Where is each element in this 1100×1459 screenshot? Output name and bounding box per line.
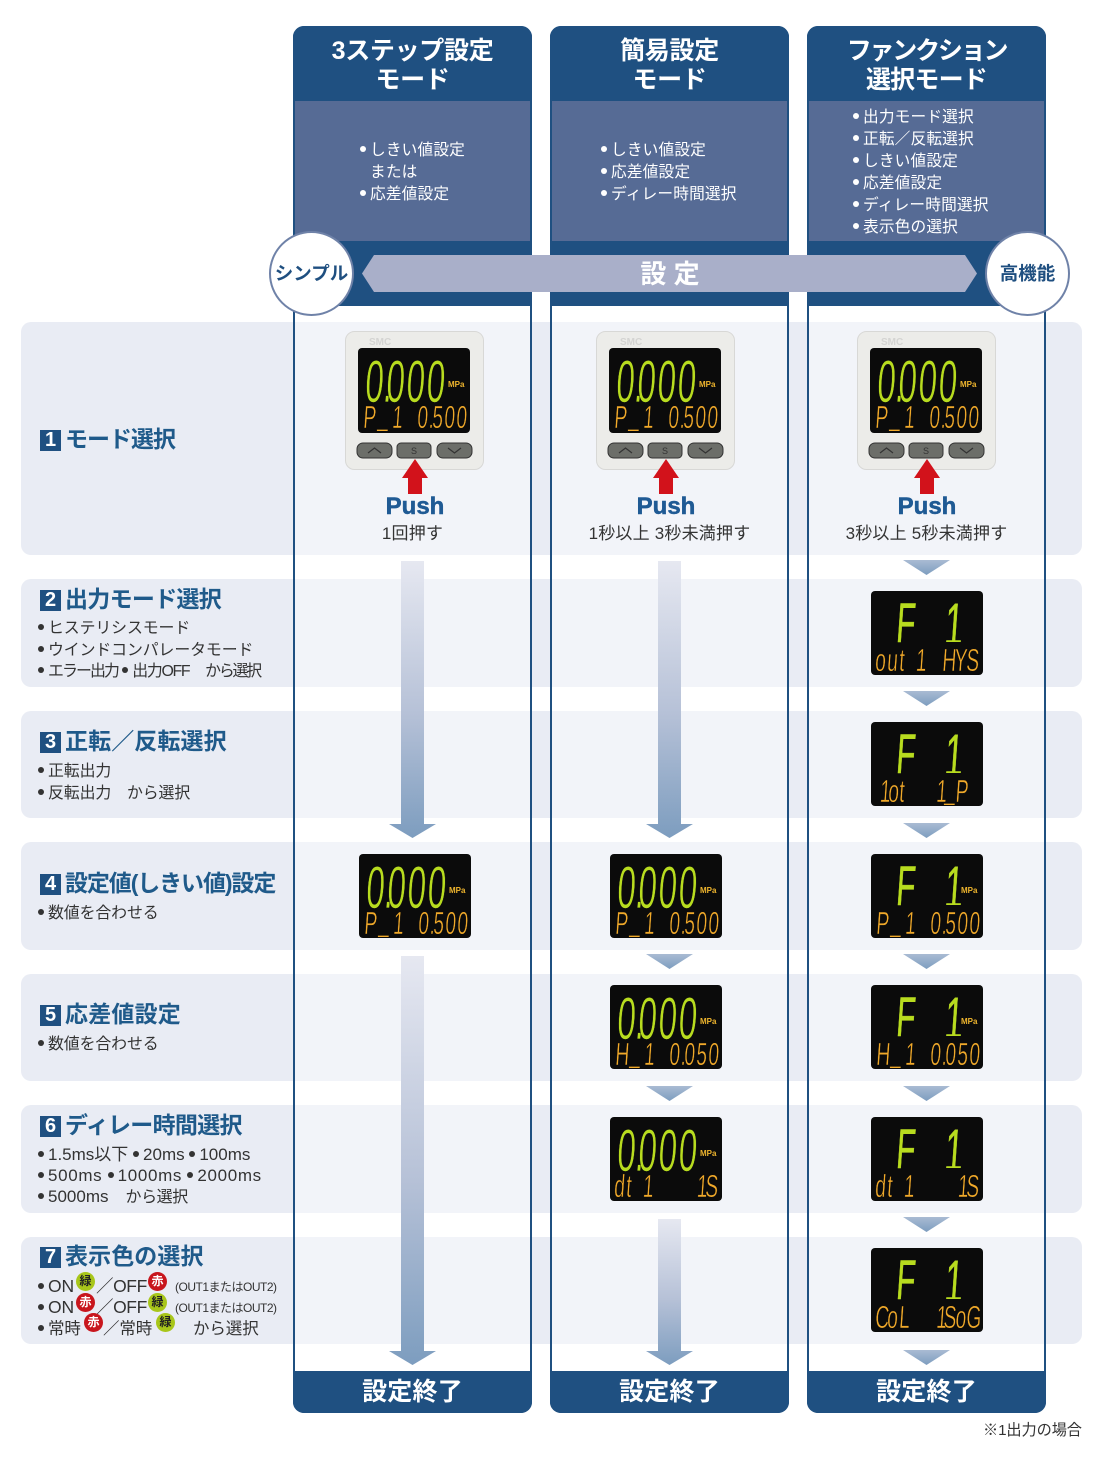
options	[38, 1145, 262, 1206]
device col 3	[857, 331, 996, 470]
step arrow	[903, 954, 950, 969]
device col 3: 0.000	[875, 349, 960, 416]
push label col 2: Push	[637, 493, 695, 520]
column: function select mode	[807, 26, 1046, 1413]
step 1 label: 1	[45, 429, 56, 451]
column header: 3ステップ設定	[332, 37, 493, 65]
display col 3 step 3: F	[895, 722, 918, 785]
step 2 label	[38, 586, 262, 680]
display col 3 step 6: 1	[943, 1118, 966, 1185]
footnote: ※1出力の場合	[983, 1422, 1082, 1439]
green badge: 緑	[151, 1295, 164, 1309]
device col 2: SMC	[620, 337, 642, 348]
heading: 3	[45, 731, 56, 753]
off text: ／OFF	[96, 1276, 147, 1296]
heading: 2	[45, 589, 56, 611]
step 5 label	[38, 1001, 181, 1053]
heading: 正転／反転選択	[65, 728, 227, 754]
option line 3 text: 常時	[48, 1320, 81, 1338]
display col 3 step 6	[871, 1117, 983, 1201]
column footer: 設定終了	[876, 1378, 977, 1406]
column header	[550, 26, 789, 101]
device col 1: 0.000	[363, 349, 448, 416]
device col 1: MPa	[448, 380, 465, 389]
column header: ファンクション	[847, 37, 1006, 65]
options: 反転出力 から選択	[48, 784, 190, 802]
step arrow	[646, 1086, 693, 1101]
red badge	[84, 1313, 103, 1332]
heading: 7	[45, 1246, 56, 1268]
red arrow col 1	[402, 459, 428, 494]
green badge	[156, 1313, 175, 1332]
feature list panel: ディレー時間選択	[863, 197, 989, 214]
caption col 1: 1回押す	[382, 524, 443, 543]
step arrow	[903, 823, 950, 838]
step 3 label	[38, 728, 227, 802]
header lower bar	[293, 241, 532, 306]
device col 1: P_ 1	[362, 396, 405, 435]
display col 1 step 4	[359, 854, 471, 938]
display col 3 step 5: 1	[943, 986, 966, 1053]
display col 3 step 7	[871, 1248, 983, 1332]
step 4 label	[38, 870, 276, 922]
display col 3 step 3: 1	[943, 723, 966, 790]
circle: high function: 高機能	[1000, 263, 1055, 284]
column: 3 step mode	[293, 26, 532, 1413]
device col 1: SMC	[369, 337, 391, 348]
option line 1 text: ON	[48, 1276, 74, 1296]
options: 正転出力	[48, 763, 111, 780]
device col 1: 0.500	[416, 399, 469, 435]
green badge: 緑	[79, 1274, 92, 1288]
feature list panel: しきい値設定	[611, 142, 706, 159]
step arrow	[903, 1217, 950, 1232]
display col 2 step 6	[610, 1117, 722, 1201]
feature list panel: 出力モード選択	[863, 109, 974, 126]
step 6 label	[38, 1112, 262, 1206]
caption col 2: 1秒以上 3秒未満押す	[589, 524, 750, 543]
long arrow col 1 lower	[389, 956, 436, 1365]
heading: 応差値設定	[65, 1001, 181, 1027]
step arrow	[903, 560, 950, 575]
red badge	[148, 1272, 167, 1291]
red arrow col 2	[653, 459, 679, 494]
device col 2: MPa	[699, 380, 716, 389]
green badge: 緑	[159, 1315, 172, 1329]
display col 1 step 4: 0.000	[364, 855, 449, 922]
display col 3 step 6: F	[895, 1117, 918, 1180]
device col 3: 0.500	[928, 399, 981, 435]
display col 2 step 4: 0.000	[615, 855, 700, 922]
green badge	[76, 1272, 95, 1291]
options: 数値を合わせる	[48, 905, 159, 922]
column footer	[807, 1371, 1046, 1413]
options	[38, 620, 262, 680]
red arrow col 3	[914, 459, 940, 494]
row 2 background	[21, 579, 1082, 687]
step arrow	[903, 1350, 950, 1365]
column header: モード	[632, 66, 707, 94]
feature list panel: 応差値設定	[370, 186, 449, 203]
display col 3 step 2	[871, 591, 983, 675]
display col 2 step 4: MPa	[700, 886, 717, 895]
feature list panel	[809, 101, 1044, 241]
column footer: 設定終了	[619, 1378, 720, 1406]
step arrow	[903, 1086, 950, 1101]
red badge: 赤	[87, 1315, 100, 1329]
feature list panel: ディレー時間選択	[611, 186, 737, 203]
feature list panel: しきい値設定	[370, 142, 465, 159]
heading: ディレー時間選択	[65, 1112, 242, 1138]
display col 2 step 5: 0.000	[615, 986, 700, 1053]
display col 1 step 4: MPa	[449, 886, 466, 895]
row 5 background	[21, 974, 1082, 1081]
feature list panel: しきい値設定	[863, 153, 958, 170]
column header	[807, 26, 1046, 101]
select text: から選択	[193, 1320, 259, 1338]
row 4 background	[21, 842, 1082, 950]
column footer	[550, 1371, 789, 1413]
long arrow col 2 upper	[646, 561, 693, 838]
device col 2: P_ 1	[613, 396, 656, 435]
column: easy mode	[550, 26, 789, 1413]
heading: 6	[45, 1115, 56, 1137]
column header: 選択モード	[866, 66, 987, 94]
display col 2 step 6: 0.000	[615, 1118, 700, 1185]
column header: モード	[375, 66, 450, 94]
settings double arrow band	[362, 255, 977, 292]
display col 3 step 3	[871, 722, 983, 806]
column header	[293, 26, 532, 101]
step arrow	[646, 954, 693, 969]
heading: 5	[45, 1004, 56, 1026]
display col 3 step 4: 1	[943, 855, 966, 922]
device col 3: S	[923, 446, 929, 456]
circle: high function	[985, 231, 1070, 316]
red badge: 赤	[151, 1274, 164, 1288]
column footer	[293, 1371, 532, 1413]
display col 2 step 5	[610, 985, 722, 1069]
display col 3 step 7: 1	[943, 1249, 966, 1316]
feature list panel: 応差値設定	[863, 175, 942, 192]
display col 3 step 2: F	[895, 591, 918, 654]
device col 2: S	[662, 446, 668, 456]
heading: 設定値(しきい値)設定	[65, 870, 275, 896]
step 7 label	[38, 1243, 277, 1338]
display col 3 step 5	[871, 985, 983, 1069]
options: 5000ms から選択	[48, 1187, 188, 1206]
green badge	[148, 1293, 167, 1312]
feature list panel: または	[370, 164, 418, 181]
step 1 label: モード選択	[65, 426, 175, 452]
step arrow	[903, 691, 950, 706]
heading: 4	[45, 873, 56, 895]
device col 1	[345, 331, 484, 470]
display col 2 step 6: MPa	[700, 1149, 717, 1158]
display col 3 step 5: MPa	[961, 1017, 978, 1026]
display col 3 step 4	[871, 854, 983, 938]
options: 数値を合わせる	[48, 1036, 159, 1053]
option line 2 text: ON	[48, 1297, 74, 1317]
display col 2 step 5: MPa	[700, 1017, 717, 1026]
row 6 background	[21, 1105, 1082, 1213]
feature list panel	[295, 101, 530, 241]
device col 2: 0.000	[614, 349, 699, 416]
options: 500ms 1000ms 2000ms	[48, 1166, 262, 1185]
device col 3: MPa	[960, 380, 977, 389]
display col 3 step 5: F	[895, 985, 918, 1048]
feature list panel: 正転／反転選択	[863, 131, 974, 148]
long arrow col 1 upper	[389, 561, 436, 838]
options: ヒステリシスモード	[48, 620, 190, 637]
output note: (OUT1またはOUT2)	[175, 1301, 277, 1315]
long arrow col 2 lower	[646, 1219, 693, 1365]
device col 3: SMC	[881, 337, 903, 348]
display col 3 step 7: F	[895, 1248, 918, 1311]
display col 3 step 4: MPa	[961, 886, 978, 895]
device col 2: 0.500	[667, 399, 720, 435]
options	[38, 762, 190, 802]
caption col 3: 3秒以上 5秒未満押す	[846, 524, 1007, 543]
display col 2 step 4	[610, 854, 722, 938]
red badge	[76, 1293, 95, 1312]
display col 3 step 2: 1	[943, 592, 966, 659]
row 3 background	[21, 711, 1082, 818]
always text: ／常時	[103, 1320, 152, 1338]
push label col 3: Push	[898, 493, 956, 520]
options: 1.5ms以下 20ms 100ms	[48, 1145, 250, 1164]
heading: 出力モード選択	[65, 586, 221, 612]
options: ウインドコンパレータモード	[48, 642, 253, 658]
device col 2	[596, 331, 735, 470]
heading: 表示色の選択	[65, 1243, 204, 1269]
display col 3 step 4: F	[895, 854, 918, 917]
output note: (OUT1またはOUT2)	[175, 1280, 277, 1294]
device col 3: P_ 1	[874, 396, 917, 435]
column header: 簡易設定	[620, 37, 719, 65]
options: エラー出力 出力OFF から選択	[48, 663, 260, 680]
row 1 background	[21, 322, 1082, 555]
circle: simple	[269, 231, 354, 316]
header lower bar	[550, 241, 789, 306]
row 7 background	[21, 1237, 1082, 1344]
red badge: 赤	[79, 1295, 92, 1309]
feature list panel	[552, 101, 787, 241]
header lower bar	[807, 241, 1046, 306]
circle: simple: シンプル	[275, 263, 348, 284]
column footer: 設定終了	[362, 1378, 463, 1406]
feature list panel: 応差値設定	[611, 164, 690, 181]
push label col 1: Push	[386, 493, 444, 520]
settings double arrow band: 設 定	[640, 259, 700, 289]
off text: ／OFF	[96, 1297, 147, 1317]
device col 1: S	[411, 446, 417, 456]
feature list panel: 表示色の選択	[863, 219, 958, 236]
